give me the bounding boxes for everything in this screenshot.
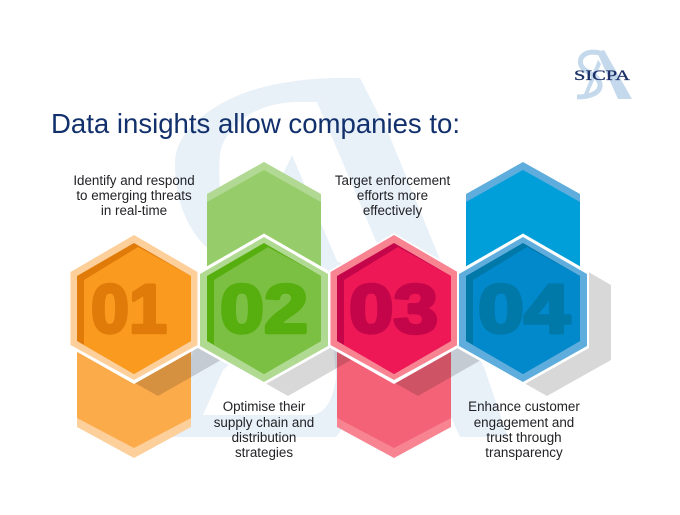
text: target — [335, 173, 450, 218]
shadows — [94, 248, 611, 396]
number 03: 03 — [349, 270, 438, 348]
text: optimise: distribution — [232, 430, 296, 445]
text: target: Target enforcement — [335, 173, 450, 188]
text: enhance: trust through — [486, 430, 562, 445]
text: identify: to emerging threats — [76, 188, 192, 203]
hexagon 04 — [457, 234, 589, 385]
text: optimise — [214, 399, 314, 460]
upper hexagon 04 — [466, 162, 580, 280]
text: identify — [73, 173, 195, 218]
text: enhance: engagement and — [474, 415, 574, 430]
watermark: SICPA monogram — [165, 78, 508, 437]
text: enhance — [468, 399, 580, 460]
text: identify: in real-time — [101, 203, 167, 218]
hexagon 01 — [68, 233, 200, 384]
lower hexagon 01 — [77, 340, 191, 458]
number 01: 01 — [91, 270, 167, 348]
text: optimise: strategies — [235, 445, 293, 460]
text: target: effectively — [363, 203, 422, 218]
logo: SICPA — [574, 50, 632, 99]
text: optimise: Optimise their — [223, 399, 306, 414]
logo: SICPA: SICPA — [574, 68, 630, 84]
text: optimise: supply chain and — [214, 415, 314, 430]
text: target: efforts more — [357, 188, 428, 203]
hexagon 03 — [328, 233, 460, 384]
upper hexagon 02 — [207, 162, 321, 280]
text: enhance: Enhance customer — [468, 399, 580, 414]
text: enhance: transparency — [485, 445, 563, 460]
number 04: 04 — [478, 270, 570, 348]
text: identify: Identify and respond — [73, 173, 195, 188]
title: Data insights allow companies to: — [51, 108, 460, 139]
hexagon 02 — [198, 234, 330, 385]
number 02: 02 — [220, 270, 308, 348]
lower hexagon 03 — [337, 340, 451, 458]
